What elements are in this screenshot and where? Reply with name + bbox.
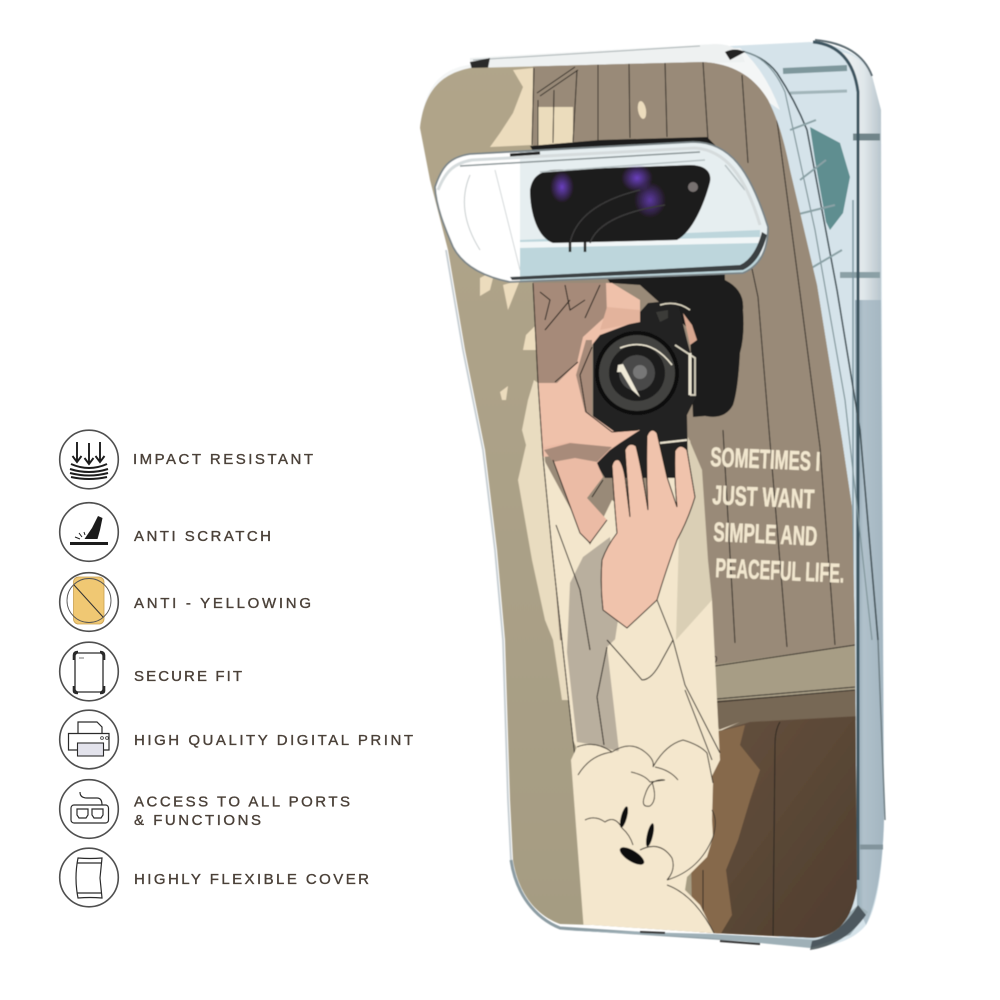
label: impact resistant: IMPACT RESISTANT — [133, 451, 313, 468]
printed artwork — [420, 62, 858, 939]
printed quote: JUST WANT — [712, 480, 815, 514]
camera — [593, 300, 697, 478]
label: secure fit: SECURE FIT — [134, 668, 242, 685]
label: anti yellowing: ANTI - YELLOWING — [134, 595, 311, 612]
label: highly flexible cover: HIGHLY FLEXIBLE COVER — [134, 871, 369, 888]
panel: phone with clear case — [400, 40, 885, 950]
clear case rim — [420, 44, 868, 950]
background: wall planks — [533, 58, 880, 700]
icon: anti scratch — [60, 503, 118, 561]
printed quote: SOMETIMES I — [710, 442, 821, 477]
panel: feature list — [60, 430, 413, 907]
label: access to all ports and functions — [134, 794, 350, 829]
wall lines — [532, 62, 835, 647]
icon: impact resistant — [60, 430, 118, 489]
label: access to all ports and functions: & FUNCTIONS — [134, 812, 261, 829]
label: high quality digital print: HIGH QUALITY DIGITAL PRINT — [134, 732, 413, 749]
background: cream light patches — [490, 68, 533, 147]
front hand — [601, 430, 695, 628]
printed quote: PEACEFUL LIFE. — [715, 553, 845, 589]
printed quote — [710, 442, 845, 589]
label: access to all ports and functions: ACCESS TO ALL PORTS — [134, 794, 350, 810]
upper hand holding camera — [533, 283, 640, 543]
icon: anti yellowing — [60, 573, 118, 631]
icon: flexible cover — [60, 848, 118, 907]
printed quote: SIMPLE AND — [713, 517, 818, 552]
label: anti scratch: ANTI SCRATCH — [134, 528, 271, 545]
ledge and chair — [690, 645, 860, 945]
background: khaki — [420, 66, 858, 938]
camera cutout cover — [430, 140, 780, 290]
icon: ports — [60, 780, 118, 838]
icon: digital print — [60, 710, 118, 769]
dog — [571, 740, 720, 945]
shirt and sleeve — [542, 437, 721, 776]
icon: secure fit — [60, 642, 118, 701]
wall signature: σ00 — [700, 655, 718, 666]
hair — [530, 137, 744, 417]
phone body behind case — [640, 40, 885, 948]
